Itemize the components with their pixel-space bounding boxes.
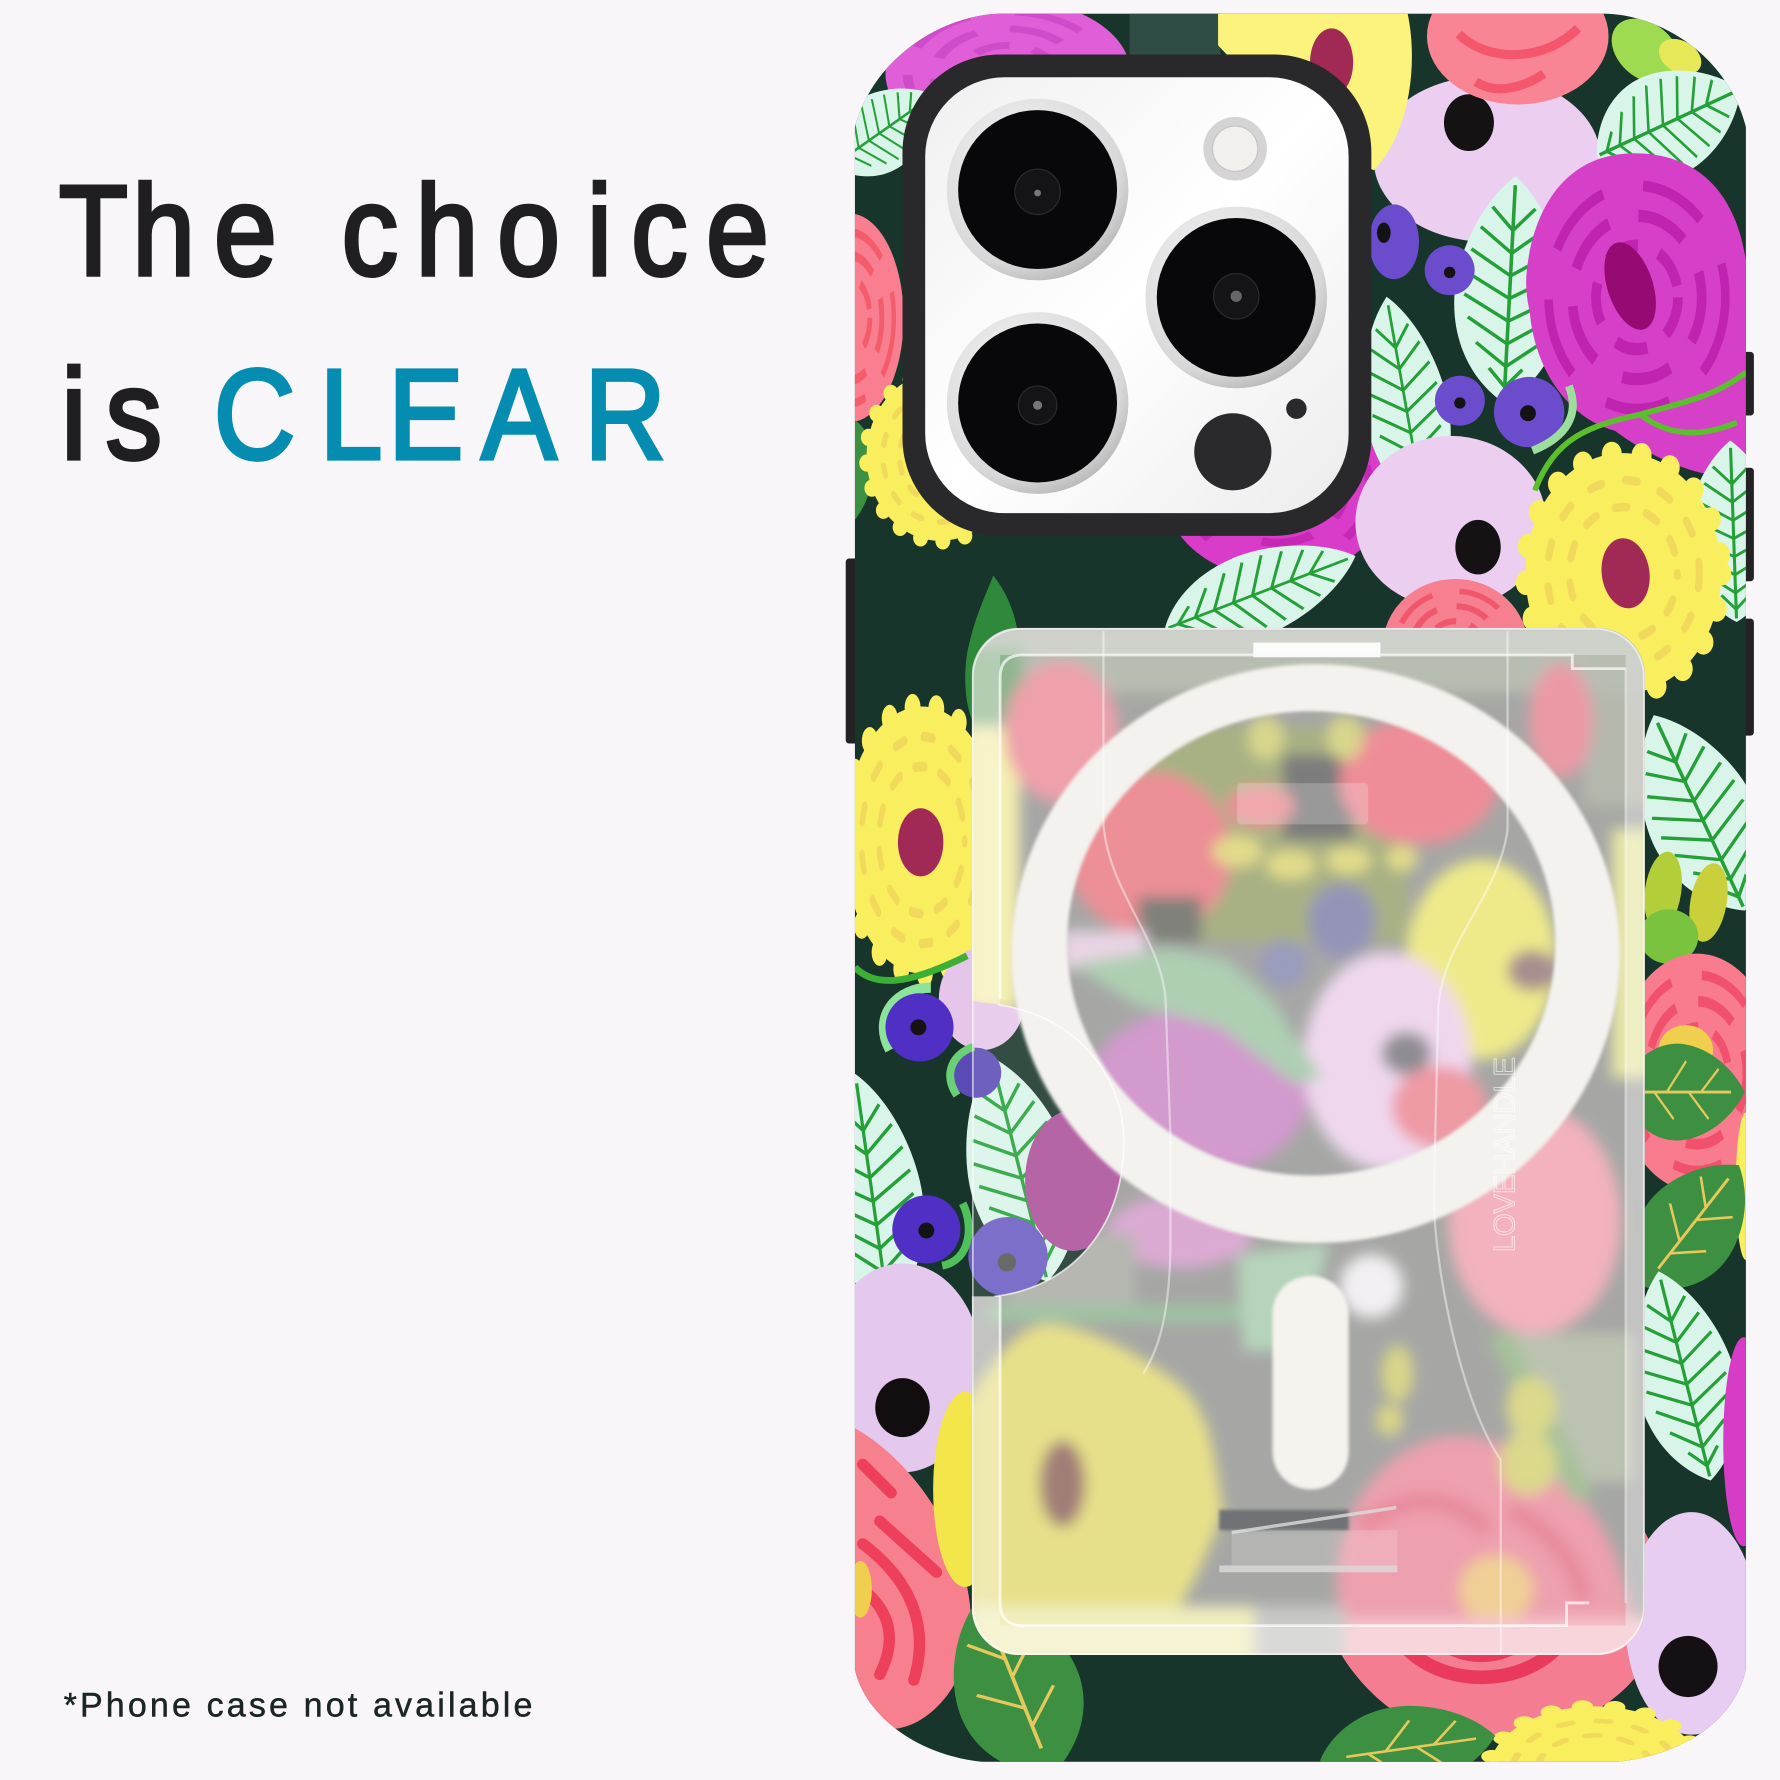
right yellow flower: [1525, 453, 1721, 693]
frame highlight: [965, 622, 1652, 1660]
left yellow flower: [854, 694, 972, 984]
floral pattern: [854, 14, 1746, 1762]
top right small leaf: [1612, 18, 1702, 79]
lilac behind card: [939, 948, 1025, 1050]
lens top left: [947, 99, 1128, 280]
bottom left anemone: [855, 1264, 972, 1472]
top yellow flower: [1218, 14, 1412, 170]
right magenta edge: [1723, 1337, 1764, 1546]
bottom clip slot: [1219, 1508, 1397, 1569]
flash: [1203, 117, 1267, 180]
bottom green leaf right: [1314, 1694, 1501, 1780]
purple rose: [1526, 153, 1748, 478]
camera island: [902, 54, 1371, 536]
brand mark: LOVEHANDLE: [1488, 1057, 1521, 1252]
left mint leaf: [854, 1074, 923, 1284]
bottom right rose: [1342, 1532, 1648, 1735]
case base: [851, 11, 1748, 1765]
camera bumper: [902, 54, 1371, 536]
lens right: [1145, 207, 1327, 388]
magenta through notch: [1025, 1110, 1120, 1251]
notch mint leaf: [966, 1060, 1068, 1281]
green stem: [1535, 372, 1746, 490]
white magnetic ring: [1011, 664, 1620, 1243]
upper lilac anemone: [1374, 76, 1601, 242]
dark slot behind bottom clip: [1219, 1510, 1349, 1530]
bottom green leaf: [954, 1608, 1084, 1762]
side buttons: [846, 352, 1754, 744]
lidar sensor: [1194, 413, 1271, 490]
microphone: [1286, 398, 1307, 419]
upper right mint leaf: [1596, 70, 1738, 168]
leaf beside camera: [1454, 176, 1544, 398]
green leaf behind card: [965, 576, 1017, 720]
bottom left rose: [855, 1428, 971, 1729]
card edge lines: [973, 629, 1644, 1655]
title: The choice: [59, 159, 769, 302]
title: is: [61, 343, 162, 486]
blueberries upper: [1369, 204, 1573, 451]
top clip slot: [1237, 783, 1368, 824]
blueberries left: [884, 988, 1048, 1296]
clear card holder: [965, 622, 1652, 1663]
green stem left: [855, 956, 967, 980]
right mint leaf: [1604, 692, 1780, 934]
footnote: *Phone case not available: [64, 1686, 532, 1724]
small pink rose: [1386, 579, 1525, 628]
lens bottom left: [947, 312, 1128, 494]
right yellow accent: [1736, 1112, 1756, 1260]
yellow behind card bottom left: [933, 1392, 972, 1587]
left top leaf: [854, 88, 924, 176]
left green leaf: [854, 420, 870, 520]
left pink rose: [854, 214, 902, 422]
edge leaf right: [1700, 440, 1746, 622]
right small leaves: [1639, 849, 1733, 964]
left yellow under camera: [859, 377, 973, 550]
frosted interior: [965, 622, 1652, 1663]
white centre pill: [1273, 1276, 1349, 1489]
lower camera magenta rose: [1180, 441, 1381, 566]
top right rose: [1426, 14, 1609, 104]
top left rose: [885, 14, 1126, 92]
right green leaf upper: [1620, 1044, 1745, 1140]
title: CLEAR: [214, 343, 666, 486]
right green leaf lower: [1606, 1135, 1777, 1317]
notch clear wash: [972, 999, 1131, 1305]
bottom yellow flower: [1481, 1700, 1696, 1762]
leaf below camera: [1165, 546, 1356, 628]
bottom right anemone: [1626, 1512, 1757, 1735]
phone case: [854, 14, 1746, 1762]
right pink rose: [1615, 954, 1779, 1192]
mid lilac anemone: [1355, 436, 1546, 608]
central mint leaf: [1371, 296, 1451, 464]
lower right mint leaf: [1610, 1259, 1759, 1493]
title: [59, 159, 769, 486]
camera plate: [925, 77, 1349, 513]
